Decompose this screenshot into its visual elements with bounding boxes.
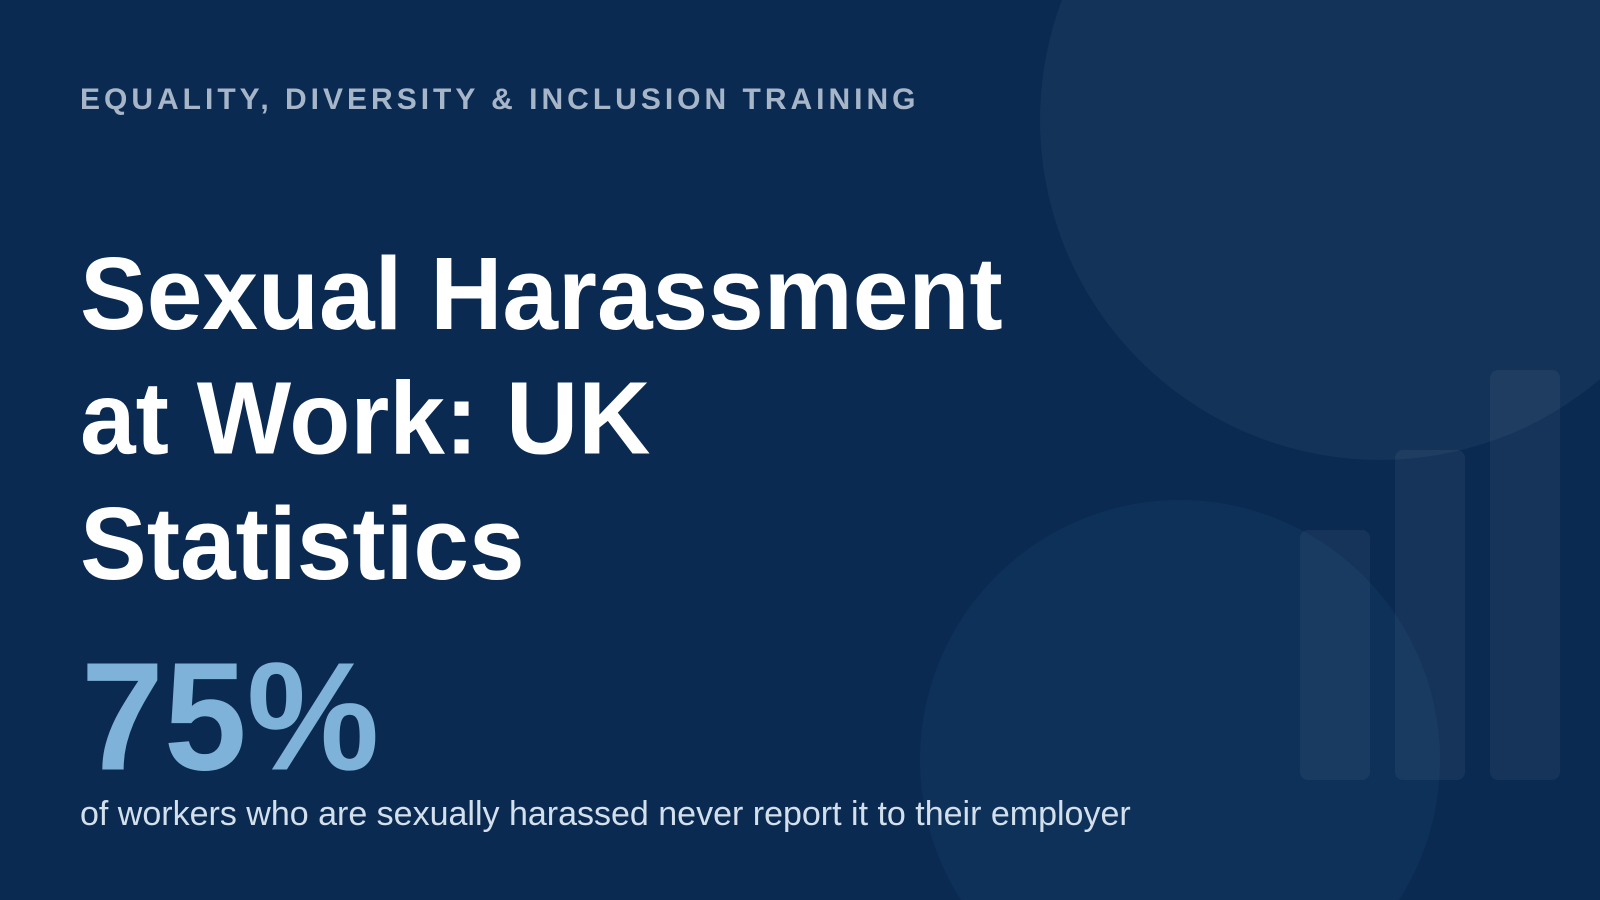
decorative circle top right — [1040, 0, 1600, 460]
title: at Work: UK — [80, 361, 650, 477]
bar 3 — [1490, 370, 1560, 780]
title: Sexual Harassment — [80, 236, 1003, 351]
eyebrow heading: EQUALITY, DIVERSITY & INCLUSION TRAINING — [80, 83, 920, 116]
icon: faint bar chart — [1300, 370, 1560, 780]
bar 1 — [1300, 530, 1370, 780]
big statistic: 75% — [81, 630, 379, 803]
title: Statistics — [80, 486, 525, 602]
title — [80, 236, 1003, 602]
decorative circle bottom — [920, 500, 1440, 900]
statistic description: of workers who are sexually harassed never report it to their employer — [80, 795, 1131, 833]
bar 2 — [1395, 450, 1465, 780]
